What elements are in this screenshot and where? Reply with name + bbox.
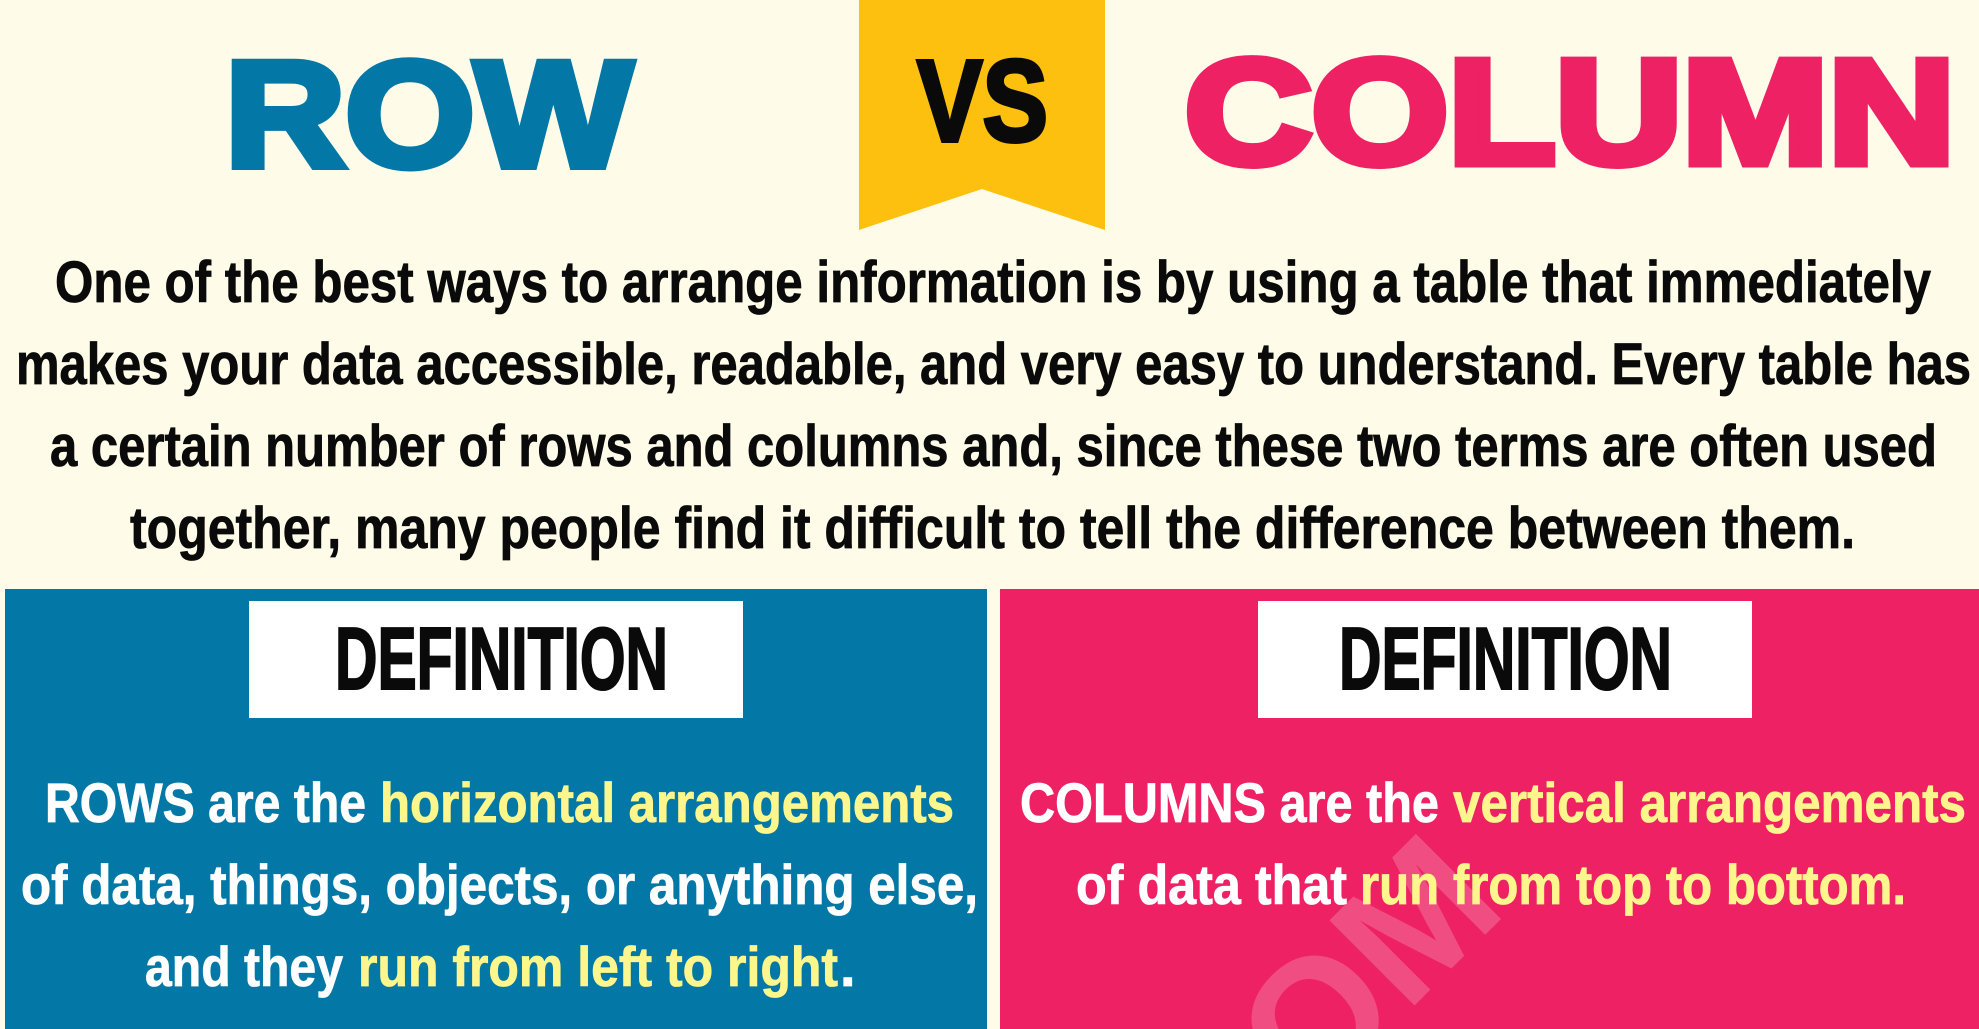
row definition text: ROWS are the — [45, 771, 366, 834]
column definition text: COLUMNS are the — [1020, 771, 1439, 834]
definition label: row: DEFINITION — [335, 609, 668, 708]
column definition text: run from top to bottom. — [1360, 853, 1906, 916]
title: COLUMN: COLUMN — [1185, 30, 1955, 195]
VS ribbon badge — [859, 0, 1105, 230]
row definition text: of data, things, objects, or anything else, — [21, 853, 978, 916]
VS ribbon badge: VS — [917, 36, 1048, 166]
row definition text: horizontal arrangements — [380, 771, 954, 834]
panel: column definition — [1000, 589, 1979, 1029]
row definition text: and they — [145, 935, 343, 998]
column definition text — [1020, 771, 1966, 916]
definition label: column: DEFINITION — [1339, 609, 1672, 708]
column definition text: of data that — [1076, 853, 1347, 916]
intro paragraph — [16, 250, 1971, 561]
row definition text — [21, 771, 978, 998]
row definition text: . — [840, 935, 856, 998]
definition label: column — [1258, 601, 1752, 718]
panel: row definition — [5, 589, 987, 1029]
definition label: row — [249, 601, 743, 718]
title: ROW: ROW — [225, 30, 632, 198]
row definition text: run from left to right — [358, 935, 838, 998]
